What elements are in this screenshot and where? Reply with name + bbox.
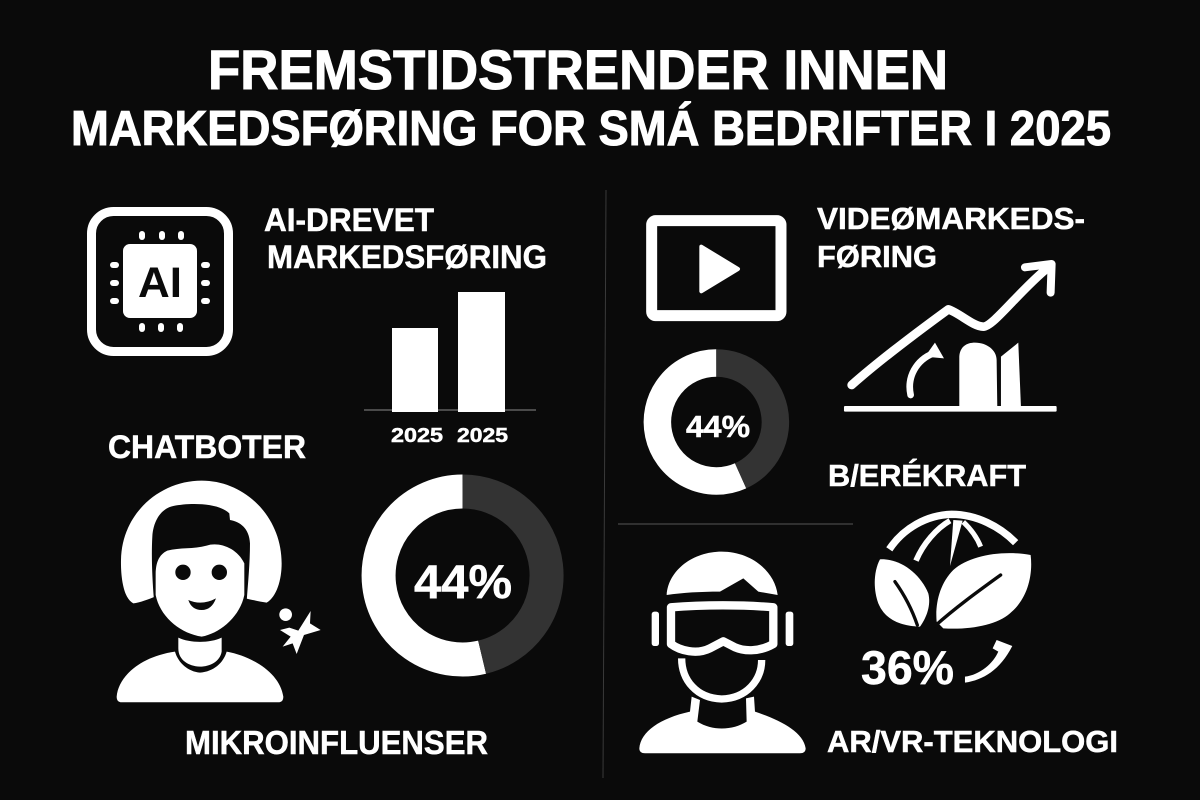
heading: videomarkedsføring [817, 201, 1085, 274]
donut chart: 44% small: 44% [686, 409, 750, 444]
bar chart: 2025 [457, 425, 508, 447]
title: MARKEDSFØRING FOR SMÁ BEDRIFTER I 2025 [71, 102, 1111, 156]
arrow: curved up [965, 640, 1012, 683]
title: FREMSTIDSTRENDER INNEN [208, 38, 948, 101]
donut chart: 44% large: 44% [414, 555, 512, 608]
bar chart [364, 292, 536, 447]
icon: person with headset [117, 481, 321, 702]
heading: AR/VR-teknologi: AR/VR-TEKNOLOGI [827, 724, 1118, 759]
stat: 36%: 36% [861, 641, 954, 694]
heading: bærekraft: B/ERÉKRAFT [828, 458, 1026, 493]
bar chart: 2025 [391, 425, 443, 447]
icon: AI chip [92, 212, 228, 352]
icon: globe with leaves [875, 514, 1031, 629]
icon: growth chart with arrow [844, 264, 1057, 412]
icon: video player [652, 221, 781, 316]
donut chart: 44% small [657, 363, 775, 481]
heading: chatboter: CHATBOTER [108, 429, 306, 465]
heading: AI-drevet markedsføring: AI-DREVET [264, 202, 434, 238]
heading: AI-drevet markedsføring: MARKEDSFØRING [267, 239, 547, 275]
heading: videomarkedsføring: VIDEØMARKEDS- [817, 201, 1085, 236]
heading: mikroinfluenser: MIKROINFLUENSER [185, 724, 488, 761]
icon: person with VR headset [639, 552, 806, 753]
heading: videomarkedsføring: FØRING [817, 239, 937, 274]
donut chart: 44% large [379, 491, 547, 659]
title [71, 38, 1111, 156]
icon: AI chip: AI [138, 259, 182, 307]
heading: AI-drevet markedsføring [264, 202, 547, 275]
